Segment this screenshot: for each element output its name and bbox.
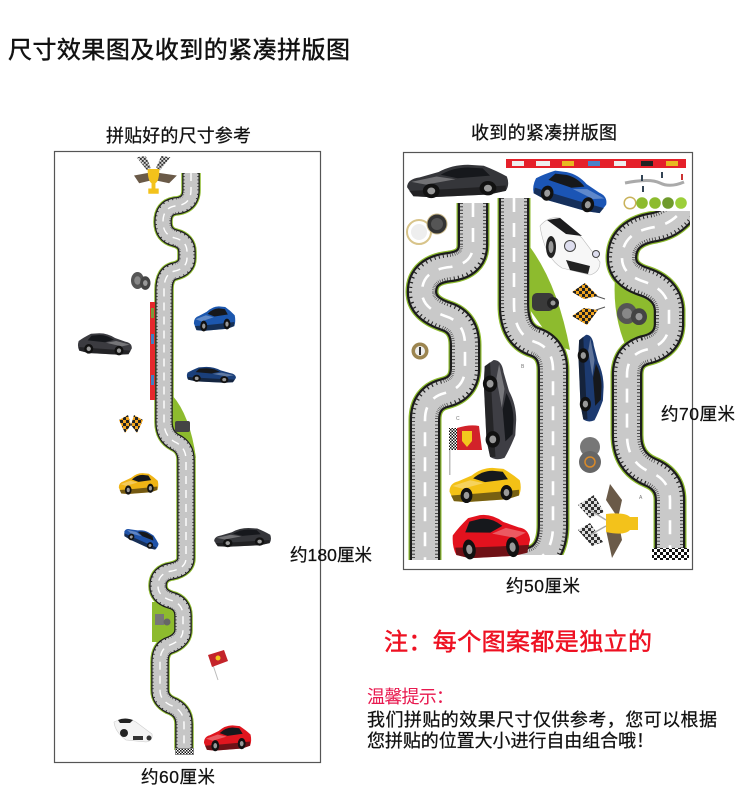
trophy with flags xyxy=(134,156,177,194)
black lamborghini xyxy=(214,528,271,547)
panel: assembled layout xyxy=(54,152,320,762)
sheet letter C: C xyxy=(456,416,460,422)
red sticker strip xyxy=(150,302,155,400)
dark supercar xyxy=(78,333,132,355)
sheet letter A: A xyxy=(639,495,643,501)
speedometer gauges xyxy=(407,214,447,244)
red note: 注：每个图案都是独立的 xyxy=(384,629,652,656)
left track xyxy=(422,203,473,560)
ferrari flag xyxy=(449,425,482,475)
panel: compact sheet xyxy=(404,152,692,570)
tyre stack xyxy=(532,293,559,311)
checkered orange flags xyxy=(119,415,143,433)
checkered finish line xyxy=(175,748,194,755)
tyres on green xyxy=(617,303,647,325)
yellow sports car xyxy=(119,473,158,495)
top-down blue concept car xyxy=(578,335,604,421)
title: 尺寸效果图及收到的紧凑拼版图 xyxy=(8,37,350,64)
small gauges xyxy=(579,437,601,473)
tyres icon xyxy=(131,272,150,290)
blue rally car xyxy=(530,166,611,216)
dimension label: 60cm: 约60厘米 xyxy=(141,767,215,787)
dimension label: 180cm: 约180厘米 xyxy=(290,545,372,565)
green patch right track xyxy=(615,278,655,355)
checkered finish line xyxy=(652,548,689,560)
orange checkered flags xyxy=(572,283,605,325)
reminder text: 您拼贴的位置大小进行自由组合哦！ xyxy=(367,731,654,751)
dimension label: 50cm: 约50厘米 xyxy=(506,576,580,596)
white porsche xyxy=(114,718,152,742)
heading: compact layout received: 收到的紧凑拼版图 xyxy=(471,123,617,143)
black lamborghini xyxy=(407,165,508,198)
trophy with flags xyxy=(578,484,638,558)
reminder heading: 温馨提示： xyxy=(367,687,454,707)
green wedge middle track xyxy=(530,247,570,350)
red sticker strip xyxy=(506,159,686,168)
reminder text: 我们拼贴的效果尺寸仅供参考，您可以根据 xyxy=(367,710,717,730)
yellow sports car xyxy=(449,468,521,503)
green patch upper xyxy=(172,395,196,458)
middle track xyxy=(495,198,553,566)
dimension label: 70cm: 约70厘米 xyxy=(661,404,735,424)
mini track sticker xyxy=(625,172,684,192)
heading: assembled size reference: 拼贴好的尺寸参考 xyxy=(106,126,251,146)
green patch lower xyxy=(152,602,176,642)
top-down grey supercar xyxy=(483,360,516,459)
ferrari flag xyxy=(208,650,228,680)
blue le mans car xyxy=(122,522,162,553)
tyres on green xyxy=(175,421,190,432)
medal badge xyxy=(412,342,428,360)
red ferrari xyxy=(204,725,251,751)
sheet letter B: B xyxy=(521,364,525,370)
red sports car xyxy=(449,509,532,565)
race track road xyxy=(158,173,191,750)
tyres in patch xyxy=(155,614,170,626)
blue concept car xyxy=(187,367,236,383)
blue rally car xyxy=(194,306,235,332)
round badges xyxy=(624,197,687,209)
white porsche xyxy=(540,218,600,275)
right track xyxy=(622,195,690,548)
reminder text xyxy=(367,710,717,751)
